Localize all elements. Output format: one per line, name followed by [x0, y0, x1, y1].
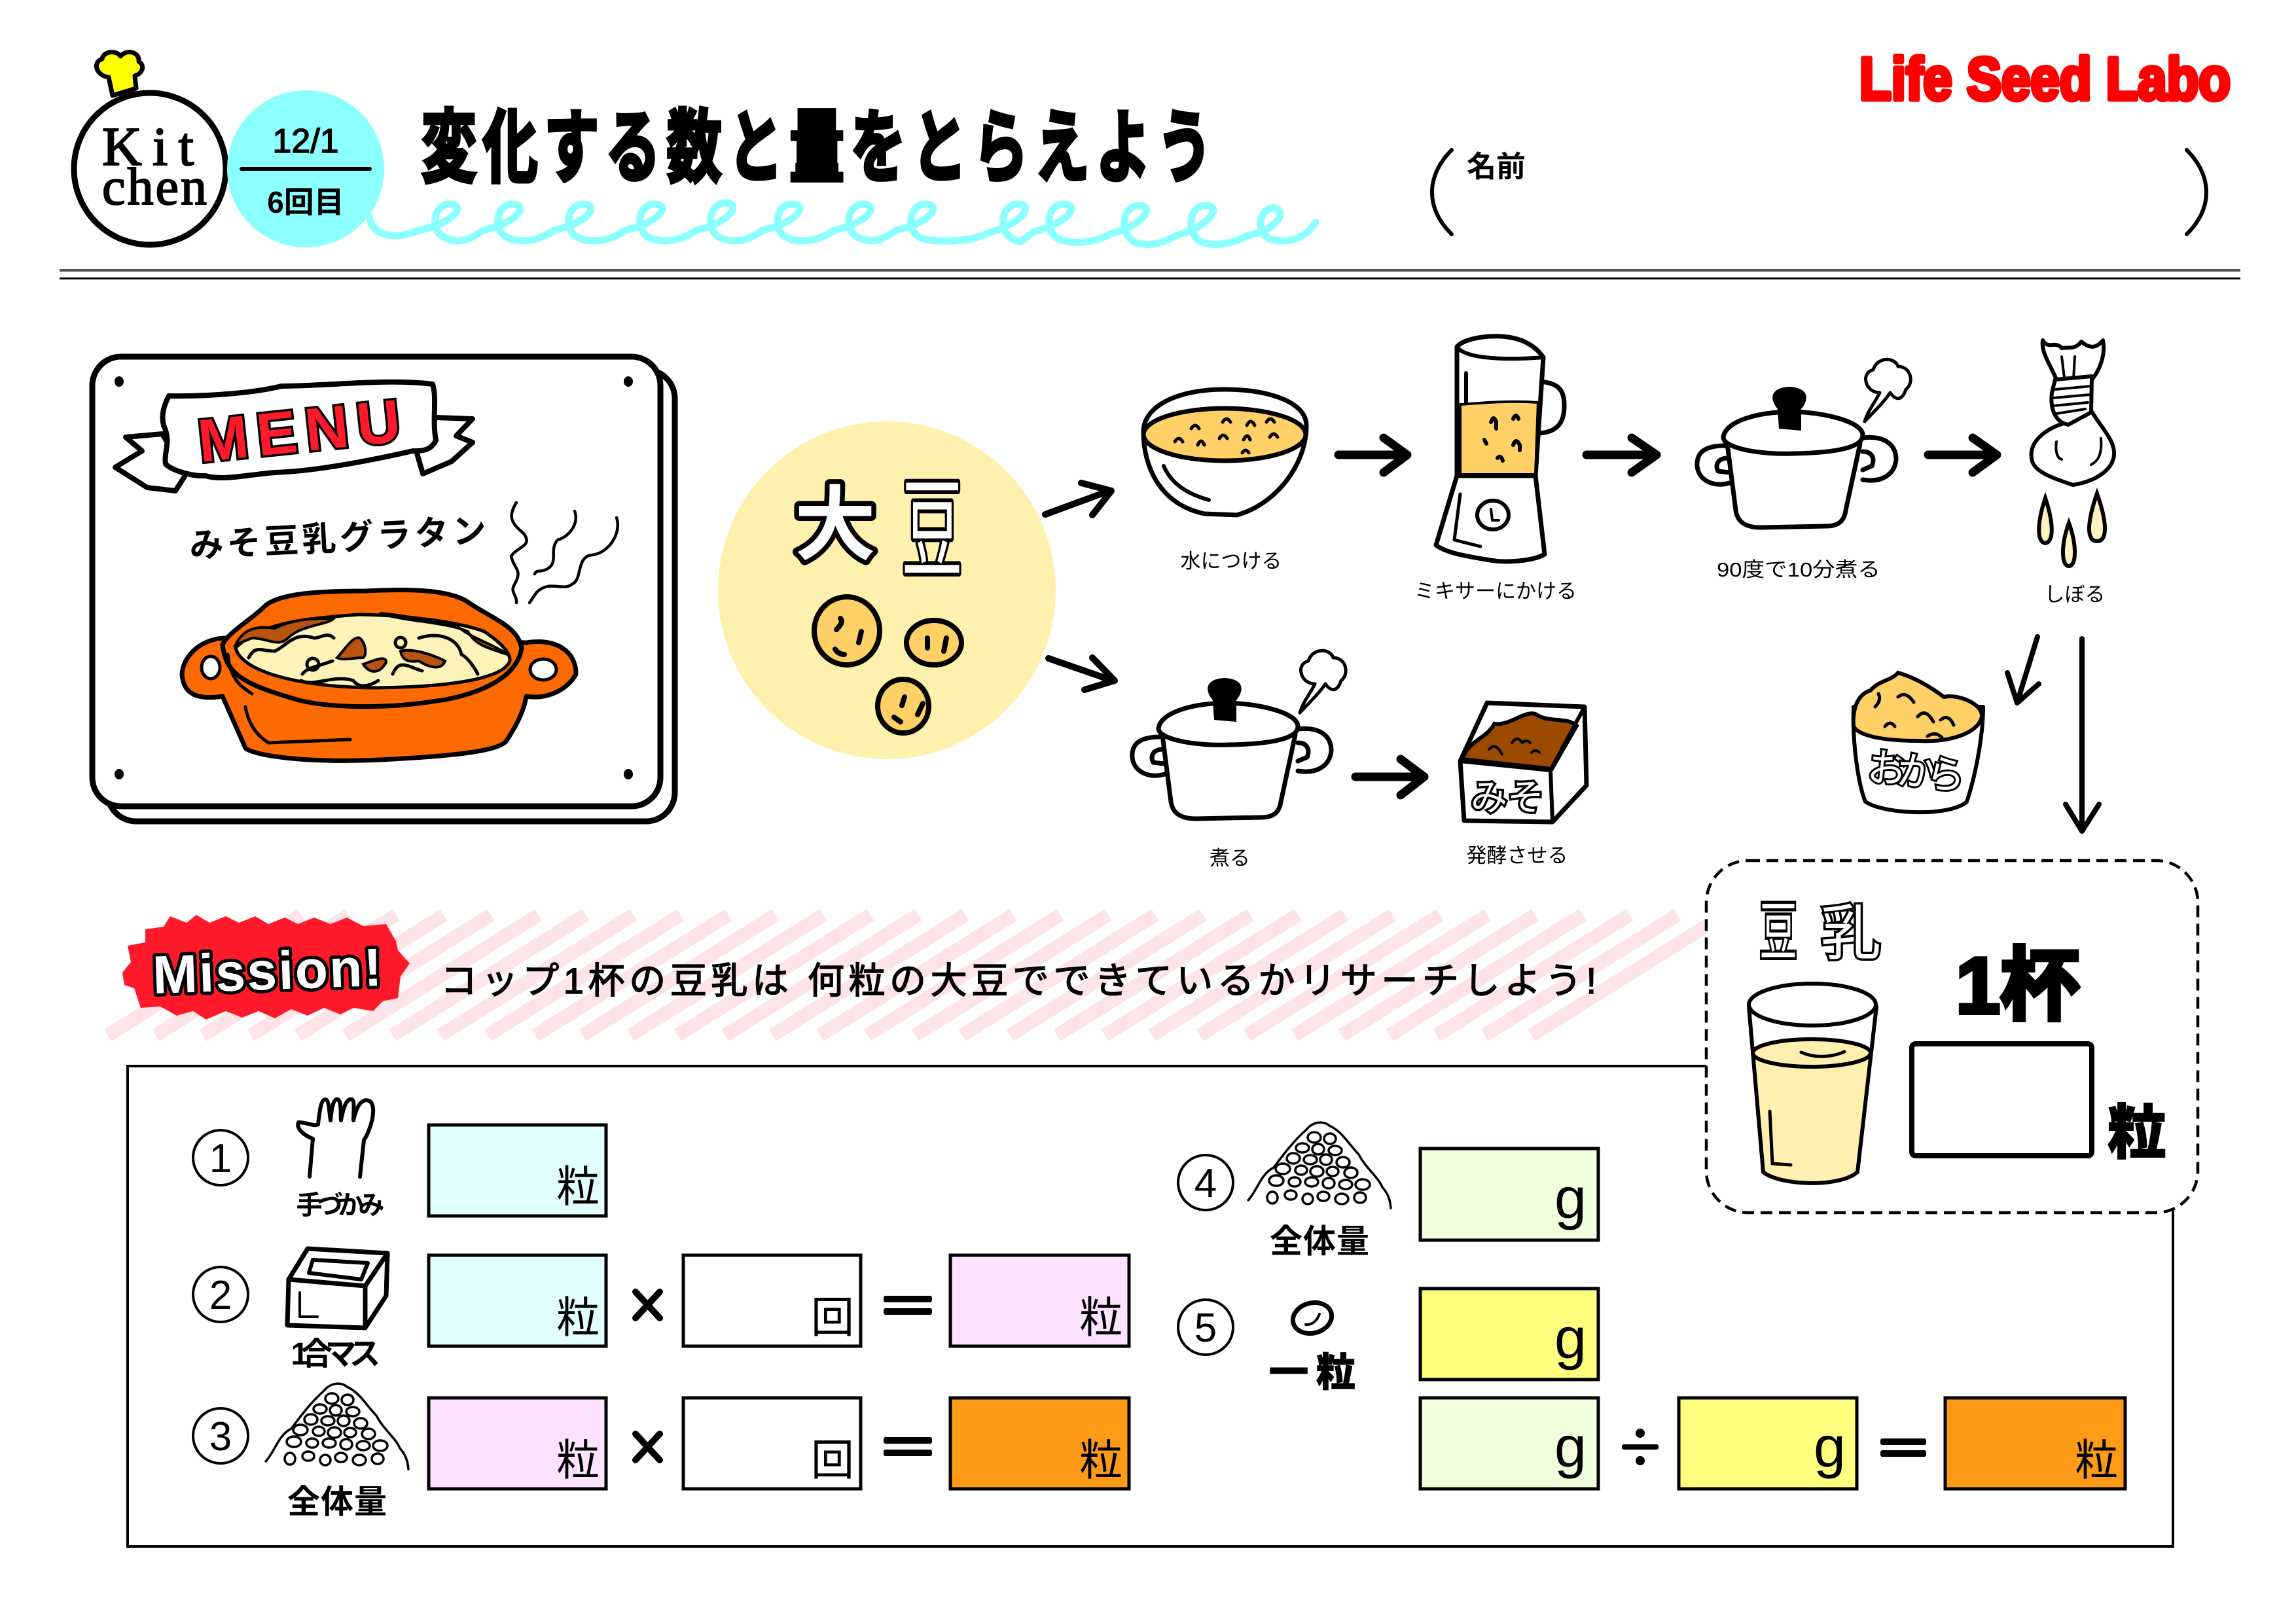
equals sign: [884, 1437, 932, 1456]
divide sign: [1622, 1429, 1659, 1465]
box: total handful: [950, 1255, 1129, 1346]
kitchen text: [102, 116, 207, 216]
icon: boiling pot: [1132, 651, 1346, 819]
soybean kanji: [795, 469, 962, 592]
row 1: handful: [193, 1099, 606, 1220]
box: cups: 回: [811, 1293, 854, 1342]
icon: chef hat: [96, 52, 143, 96]
panel: menu card: [92, 357, 675, 821]
menu title: MENU: [195, 387, 404, 475]
box: cups: [683, 1255, 861, 1346]
icon: pot: [1697, 359, 1910, 527]
decorative loop underline: [369, 203, 1316, 245]
steam: [511, 503, 618, 603]
soybean kanji: 豆: [902, 469, 962, 592]
number 5: [1178, 1300, 1233, 1355]
multiply sign: [636, 1434, 660, 1460]
number 4: [1178, 1155, 1233, 1210]
icon: okara cup: [1854, 673, 1983, 812]
mission text: Mission!: [152, 938, 383, 1005]
header rules: [60, 269, 2240, 279]
icon: glass of soy milk: [1749, 984, 1876, 1183]
arrow: to miso: [1355, 759, 1424, 795]
kitchen circle: [74, 93, 226, 245]
panel: soybean circle: [718, 421, 1056, 759]
box: handful count: 粒: [556, 1162, 600, 1211]
menu banner: [115, 382, 473, 491]
mission stripes: [108, 915, 1708, 1035]
label: simmer 90 degrees: 90度で10分煮る: [1717, 558, 1880, 581]
title: 変化する数と量をとらえよう: [422, 104, 1212, 193]
name field: 名前: [1467, 150, 1526, 183]
number 5: 5: [1194, 1306, 1217, 1351]
icon: squeezing cloth: [2032, 340, 2114, 566]
box: count: [683, 1398, 861, 1489]
row 2: measuring cup: [193, 1249, 1129, 1372]
box: per cup: [429, 1255, 606, 1346]
box: bean weight copy: g: [1814, 1414, 1846, 1479]
soybean kanji: 大: [795, 480, 876, 571]
okara label: おから: [1865, 745, 1967, 799]
arrow: to pot: [1587, 438, 1657, 473]
arrow: to blender: [1338, 438, 1407, 473]
box: whole count: [950, 1398, 1129, 1489]
number 3: [193, 1408, 248, 1463]
box: count: 回: [811, 1436, 854, 1484]
date badge: 12/1: [272, 122, 339, 160]
label: measure: 1合マス: [291, 1337, 381, 1372]
icon: blender: [1436, 336, 1564, 562]
header: kitchen badge: [74, 52, 226, 245]
label: boil: 煮る: [1210, 847, 1250, 870]
label: handful: 手づかみ: [296, 1191, 385, 1220]
multiply sign: [636, 1292, 660, 1318]
box: whole weight: g: [1554, 1166, 1587, 1230]
panel: soy milk result: [1706, 861, 2198, 1213]
box: bean weight: [1420, 1289, 1598, 1380]
row 3: whole amount: [193, 1383, 1129, 1520]
date badge: 6回目: [267, 185, 344, 219]
soy milk heading: 乳: [1821, 901, 1881, 967]
number 2: [193, 1267, 248, 1322]
soy milk heading: [1760, 897, 1881, 969]
mission badge: [122, 915, 410, 1020]
box: final count: 粒: [2075, 1436, 2118, 1484]
panel: worksheet frame: [128, 1066, 2173, 1546]
box: bean weight copy: [1679, 1398, 1857, 1489]
logo: Life Seed Labo: [1859, 46, 2231, 113]
soybeans: [814, 597, 961, 733]
arrow: soybean to boil: [1049, 658, 1115, 690]
label: whole: 全体量: [1270, 1223, 1369, 1260]
icon: single bean: [1289, 1298, 1335, 1338]
box: total handful: 粒: [1079, 1293, 1122, 1342]
row 5: single bean weight: [1178, 1289, 2125, 1489]
one cup heading: 1杯: [1956, 941, 2080, 1030]
box: whole weight: [1420, 1149, 1598, 1240]
arrow: soybean to bowl: [1045, 483, 1111, 515]
arrow: to soy milk: [2066, 639, 2099, 831]
number 2: 2: [209, 1273, 232, 1318]
number 3: 3: [209, 1414, 232, 1459]
equals sign: [1880, 1438, 1926, 1457]
number 4: 4: [1194, 1161, 1217, 1206]
miso label: みそ: [1471, 777, 1544, 818]
kitchen text: chen: [102, 158, 207, 216]
icon: soaking bowl: [1143, 389, 1306, 515]
gratin dish: [182, 590, 576, 760]
box: bean weight: g: [1554, 1306, 1587, 1370]
grain unit: 粒: [2108, 1101, 2166, 1166]
box: per cup: 粒: [556, 1293, 600, 1342]
icon: bean pile: [266, 1383, 408, 1469]
soy milk heading: 豆: [1760, 897, 1797, 969]
number 1: 1: [209, 1136, 232, 1181]
box: whole weight copy: [1420, 1398, 1598, 1489]
box: whole count: 粒: [1079, 1436, 1122, 1484]
box: result total: [429, 1398, 606, 1489]
icon: miso box: [1460, 703, 1587, 822]
icon: bean pile: [1248, 1122, 1391, 1208]
label: ferment: 発酵させる: [1466, 844, 1568, 867]
mission sentence: コップ1杯の豆乳は 何粒の大豆でできているかリサーチしよう!: [440, 960, 1596, 1001]
answer box: [1912, 1044, 2092, 1156]
date badge: [227, 90, 384, 247]
label: blend: ミキサーにかける: [1414, 580, 1577, 603]
arrow: to okara: [2007, 637, 2039, 703]
name field: [1432, 150, 2206, 234]
label: whole: 全体量: [287, 1484, 387, 1520]
box: handful count: [429, 1125, 606, 1216]
box: whole weight copy: g: [1554, 1414, 1587, 1479]
icon: hand: [298, 1099, 373, 1177]
box: final count: [1945, 1398, 2125, 1489]
label: squeeze: しぼる: [2045, 583, 2105, 606]
equals sign: [884, 1296, 932, 1315]
label: soak: 水につける: [1181, 550, 1282, 573]
icon: measure box: [287, 1249, 387, 1328]
label: one grain: 一粒: [1269, 1351, 1355, 1395]
number 1: [193, 1130, 248, 1185]
arrow: to squeeze: [1928, 438, 1997, 473]
dish name: みそ豆乳グラタン: [188, 512, 487, 565]
kitchen text: Kit: [102, 116, 194, 177]
box: result total: 粒: [556, 1436, 600, 1484]
row 4: whole weight: [1178, 1122, 1598, 1260]
